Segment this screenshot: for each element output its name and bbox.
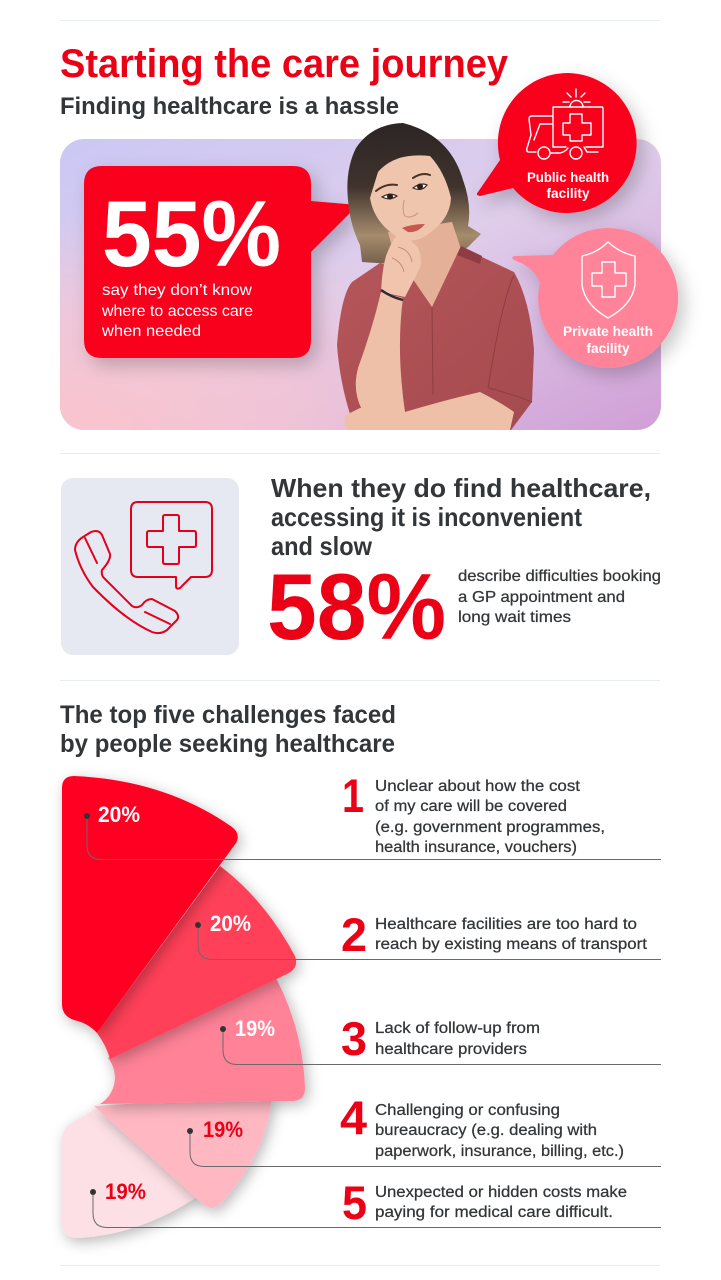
neck and chest: [388, 222, 462, 310]
list item 3: Lack of follow-up from: [375, 1020, 540, 1037]
shirt folds: [432, 275, 532, 402]
blade 5: [62, 1106, 200, 1238]
lower arm: [344, 392, 514, 430]
heading: inconvenient and slow: When they do find healthcare,: [271, 473, 651, 503]
text: 58% description: a GP appointment and: [458, 589, 625, 606]
shirt: [337, 246, 534, 430]
list item 1: [342, 769, 605, 856]
list item 2: Healthcare facilities are too hard to: [375, 916, 637, 933]
lips: [402, 224, 425, 232]
text: 58% description: long wait times: [458, 609, 571, 626]
chart: fan of five challenges: 20%: [98, 802, 140, 827]
forearm: [356, 292, 405, 424]
icon: speech bubble with cross: [131, 502, 212, 589]
callout: private health facility: [512, 228, 678, 368]
callout: public health facility: Public health: [527, 169, 609, 185]
icon: telephone handset: [75, 531, 178, 633]
list item 4: paperwork, insurance, billing, etc.): [375, 1143, 624, 1160]
chart: fan of five challenges: 19%: [105, 1179, 146, 1204]
chart: fan of five challenges: [62, 776, 661, 1238]
heading: inconvenient and slow: accessing it is inconvenient: [271, 502, 582, 532]
panel: hero card: [60, 139, 661, 430]
eyebrows: [376, 174, 430, 191]
callout: public health facility: facility: [546, 185, 590, 201]
heading: inconvenient and slow: and slow: [271, 531, 373, 561]
list item 4: bureaucracy (e.g. dealing with: [375, 1122, 597, 1139]
chart: fan of five challenges: 19%: [203, 1117, 243, 1142]
blade 4: [94, 1095, 272, 1208]
blade 1: [62, 776, 238, 1033]
list item 2: reach by existing means of transport: [375, 936, 648, 953]
list item 1: (e.g. government programmes,: [375, 819, 605, 836]
hair back: [347, 123, 481, 264]
list item 5: 5: [342, 1176, 367, 1229]
chart: fan of five challenges: 20%: [210, 911, 251, 936]
list item 1: 1: [342, 769, 364, 822]
nose: [403, 200, 418, 217]
collar: [457, 246, 482, 264]
subtitle: Finding healthcare is a hassle: [60, 93, 399, 120]
face: [370, 155, 451, 241]
list item 4: [340, 1091, 624, 1160]
heading: top five challenges: [60, 701, 396, 758]
callout: private health facility: Private health: [563, 323, 653, 339]
callout: 55% statistic: when needed: [101, 323, 201, 340]
list item 1: health insurance, vouchers): [375, 839, 577, 856]
list item 3: [341, 1012, 540, 1065]
list item 1: Unclear about how the cost: [375, 778, 581, 795]
wristband: [381, 290, 403, 300]
text: 58% description: describe difficulties booking: [458, 568, 661, 585]
list item 4: Challenging or confusing: [375, 1102, 560, 1119]
chart: fan of five challenges: 19%: [235, 1016, 275, 1041]
callout: 55% statistic: where to access care: [101, 303, 253, 320]
hand: [381, 234, 421, 297]
eyes: [382, 184, 427, 199]
callout: 55% statistic: [84, 166, 358, 358]
statistic: 58%: 58%: [267, 554, 446, 659]
heading: inconvenient and slow: [271, 473, 651, 561]
list item 1: of my care will be covered: [375, 798, 567, 815]
list item 2: [341, 908, 648, 961]
list item 2: 2: [341, 908, 367, 961]
panel: phone icon: [61, 478, 239, 655]
callout: public health facility: [477, 73, 637, 213]
callout: 55% statistic: say they don’t know: [102, 282, 252, 299]
illustration: thinking woman: [337, 123, 534, 430]
icon: shield: [582, 242, 635, 318]
list item 5: [342, 1176, 627, 1229]
list item 4: 4: [340, 1091, 367, 1144]
list item 5: paying for medical care difficult.: [375, 1204, 613, 1221]
icon: ambulance: [527, 89, 603, 159]
list item 5: Unexpected or hidden costs make: [375, 1184, 627, 1201]
callout: private health facility: facility: [586, 340, 630, 356]
heading: top five challenges: The top five challenges faced: [60, 701, 396, 729]
heading: top five challenges: by people seeking healthcare: [60, 730, 395, 758]
blade 3: [100, 978, 305, 1104]
leader lines: [87, 816, 661, 860]
list item 3: healthcare providers: [375, 1041, 527, 1058]
blade 2: [97, 866, 296, 1059]
list item 3: 3: [341, 1012, 367, 1065]
callout: 55% statistic: 55%: [102, 181, 281, 286]
title: Starting the care journey: [60, 42, 509, 86]
text: 58% description: [458, 568, 661, 626]
